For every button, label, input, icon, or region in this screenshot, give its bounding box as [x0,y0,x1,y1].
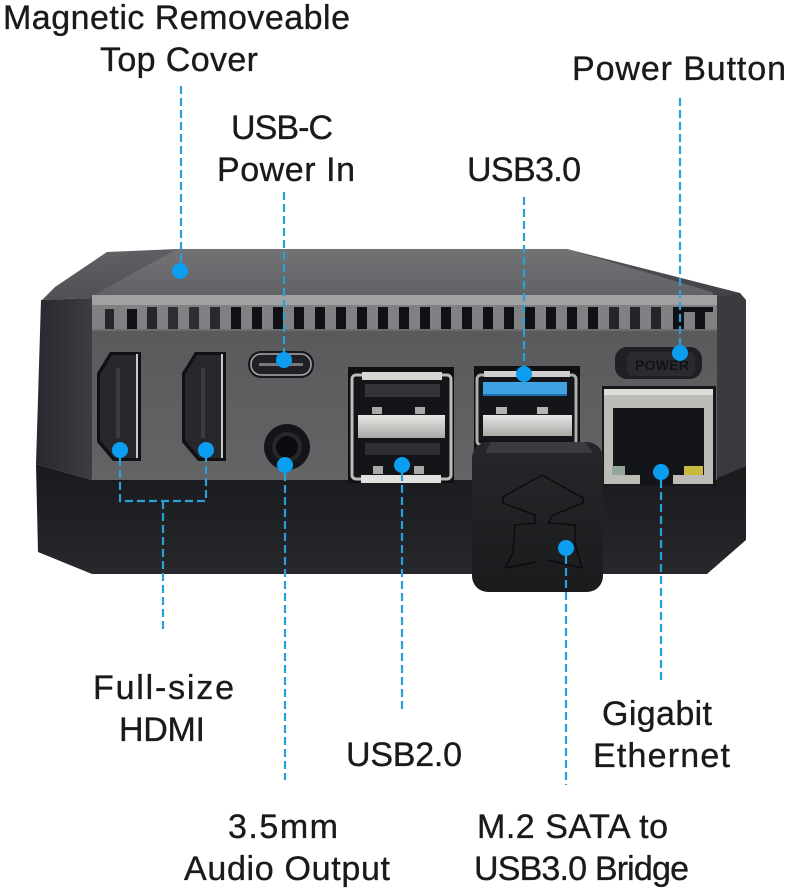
M.2 SATA bridge dongle [472,442,603,592]
dongle logo [503,475,583,568]
callout dots [112,263,688,556]
label: magnetic removeable top cover: Magnetic Removeable [3,0,350,37]
label: full-size HDMI [93,669,234,749]
label: gigabit ethernet: Ethernet [593,737,731,775]
label: 3.5mm audio output: Audio Output [184,850,391,888]
label: USB-C power in: Power In [217,151,355,189]
port: USB 3.0 [474,366,580,456]
port: HDMI 1 [97,352,141,461]
label: magnetic removeable top cover [3,0,350,79]
callout lines [120,86,680,785]
case top cover [42,249,745,300]
port: gigabit ethernet [602,386,716,486]
label: full-size HDMI: Full-size [93,669,234,707]
case front panel [92,298,717,480]
port: USB 2.0 [348,367,454,483]
port: audio jack [264,424,310,470]
case base [36,464,746,574]
power button: POWER [635,357,689,373]
label: full-size HDMI: HDMI [119,711,205,749]
label: USB2.0: USB2.0 [346,736,462,774]
power button [615,347,702,379]
case left and right sides [36,293,746,482]
label: power button: Power Button [572,50,786,88]
label: M.2 SATA to USB3.0 bridge: USB3.0 Bridge [474,850,689,888]
label: USB-C power in: USB-C [231,109,333,147]
vent strip [92,295,717,331]
label: M.2 SATA to USB3.0 bridge [474,808,689,888]
label: USB3.0: USB3.0 [467,151,581,189]
label: M.2 SATA to USB3.0 bridge: M.2 SATA to [477,808,668,846]
port: USB-C [248,351,314,378]
label: 3.5mm audio output: 3.5mm [228,808,338,846]
label: gigabit ethernet [593,695,731,775]
label: 3.5mm audio output [184,808,391,888]
label: USB-C power in [217,109,355,189]
label: gigabit ethernet: Gigabit [602,695,713,733]
device: case body [36,249,746,574]
label: magnetic removeable top cover: Top Cover [100,41,258,79]
port: HDMI 2 [182,352,226,461]
